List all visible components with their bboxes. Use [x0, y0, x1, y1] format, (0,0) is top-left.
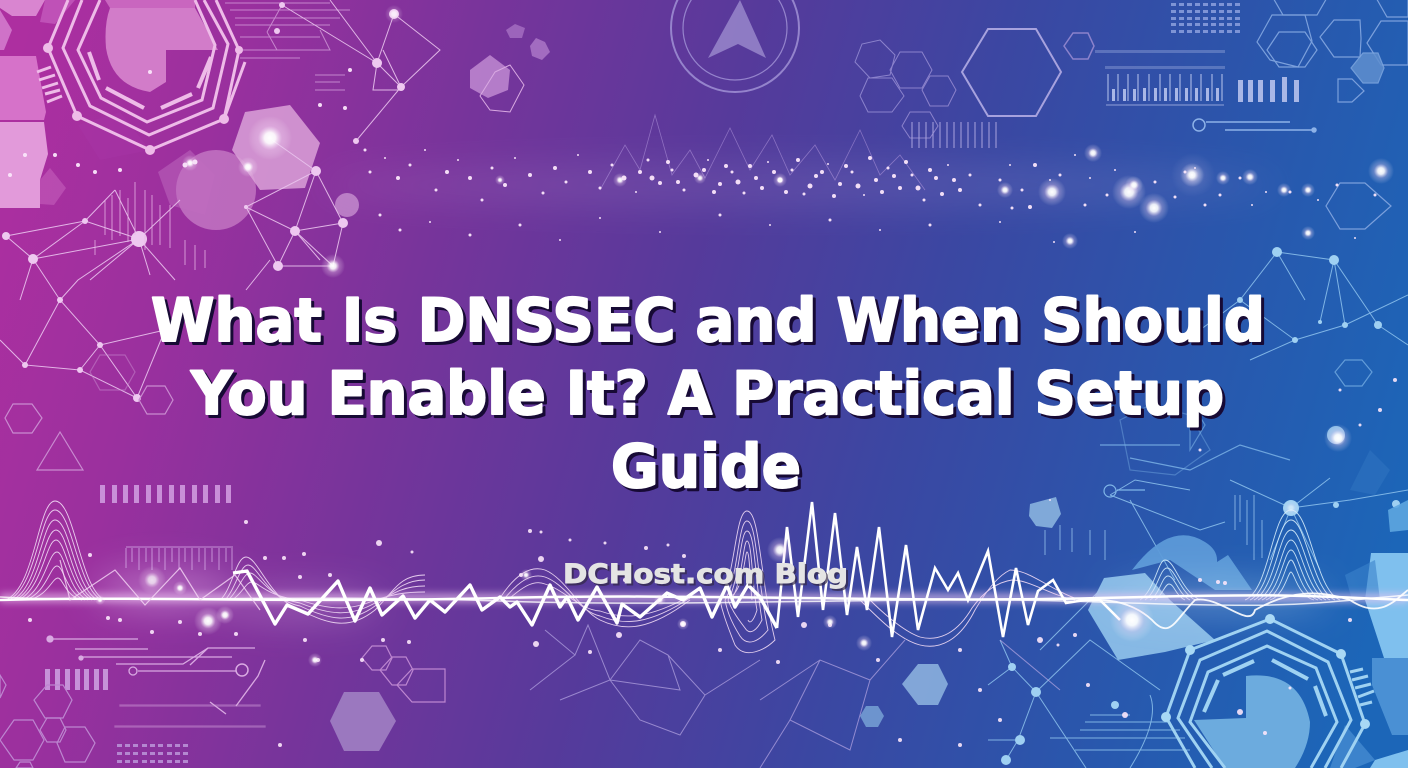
icon: bottom-right octagonal rings — [1161, 614, 1374, 768]
bar chart: top-right data bars — [1095, 50, 1299, 106]
lower small stars — [28, 378, 1397, 747]
chart: central faint mountain line — [600, 115, 925, 190]
title: What Is DNSSEC and When Should — [151, 286, 1265, 356]
icon: left outline hexagons and triangle — [5, 355, 173, 470]
lower glowing stars — [95, 424, 1352, 667]
chart: faint circuit lines top — [225, 3, 350, 90]
icon: right side hexagon outlines — [1100, 360, 1390, 497]
glowing stars — [182, 5, 1394, 278]
panel: central star band — [8, 5, 1394, 278]
bar chart: bottom-left small bars — [45, 669, 108, 690]
bar chart: left pale bars — [100, 485, 231, 503]
small stars — [8, 68, 1376, 243]
title: Guide — [611, 432, 801, 502]
chart: jagged white signal line left — [233, 571, 777, 628]
chart: barcode block above wave — [126, 547, 233, 570]
chart: left network graph — [0, 0, 440, 398]
panel: bottom-right blue shapes — [860, 497, 1408, 768]
panel: top-left magenta shapes — [0, 0, 550, 230]
chart: bottom-left circuit traces — [47, 636, 265, 727]
chart: glowing baseline signal — [0, 560, 1408, 628]
icon: top-center circular emblem — [671, 0, 799, 92]
icon: bottom hexagon cluster left — [0, 646, 445, 768]
icon: top-right hexagon cluster — [1257, 0, 1408, 229]
panel: right network graph — [988, 247, 1408, 768]
icon: bottom filled hexagon — [330, 692, 396, 751]
icon: hexagon clusters upper center — [855, 33, 1094, 148]
icon: top-right large hexagon outline — [962, 29, 1061, 116]
icon: bottom dot grid — [117, 744, 188, 763]
chart: jagged white signal line right — [777, 502, 1120, 637]
band haze — [320, 163, 1280, 207]
icon: top-right timeline connector — [1193, 119, 1316, 132]
title — [151, 286, 1265, 502]
chart: right waveform mesh — [1140, 510, 1340, 600]
panel: lower sparkle field — [28, 378, 1397, 747]
icon: top-left octagonal rings — [37, 0, 245, 155]
title: You Enable It? A Practical Setup — [190, 359, 1224, 429]
icon: top-right dot grid — [1171, 3, 1240, 33]
right network nodes — [1001, 247, 1400, 765]
chart: left spike plot — [95, 182, 205, 270]
subtitle: blog name: DCHost.com Blog — [563, 559, 848, 590]
chart: waveform glow haze — [95, 572, 1330, 619]
chart: bottom-center network lines — [530, 625, 1060, 768]
chart: waveform mesh — [5, 501, 1080, 653]
icon: left network nodes — [2, 2, 405, 402]
right spike plot — [1045, 495, 1262, 560]
right network lines — [988, 252, 1408, 768]
